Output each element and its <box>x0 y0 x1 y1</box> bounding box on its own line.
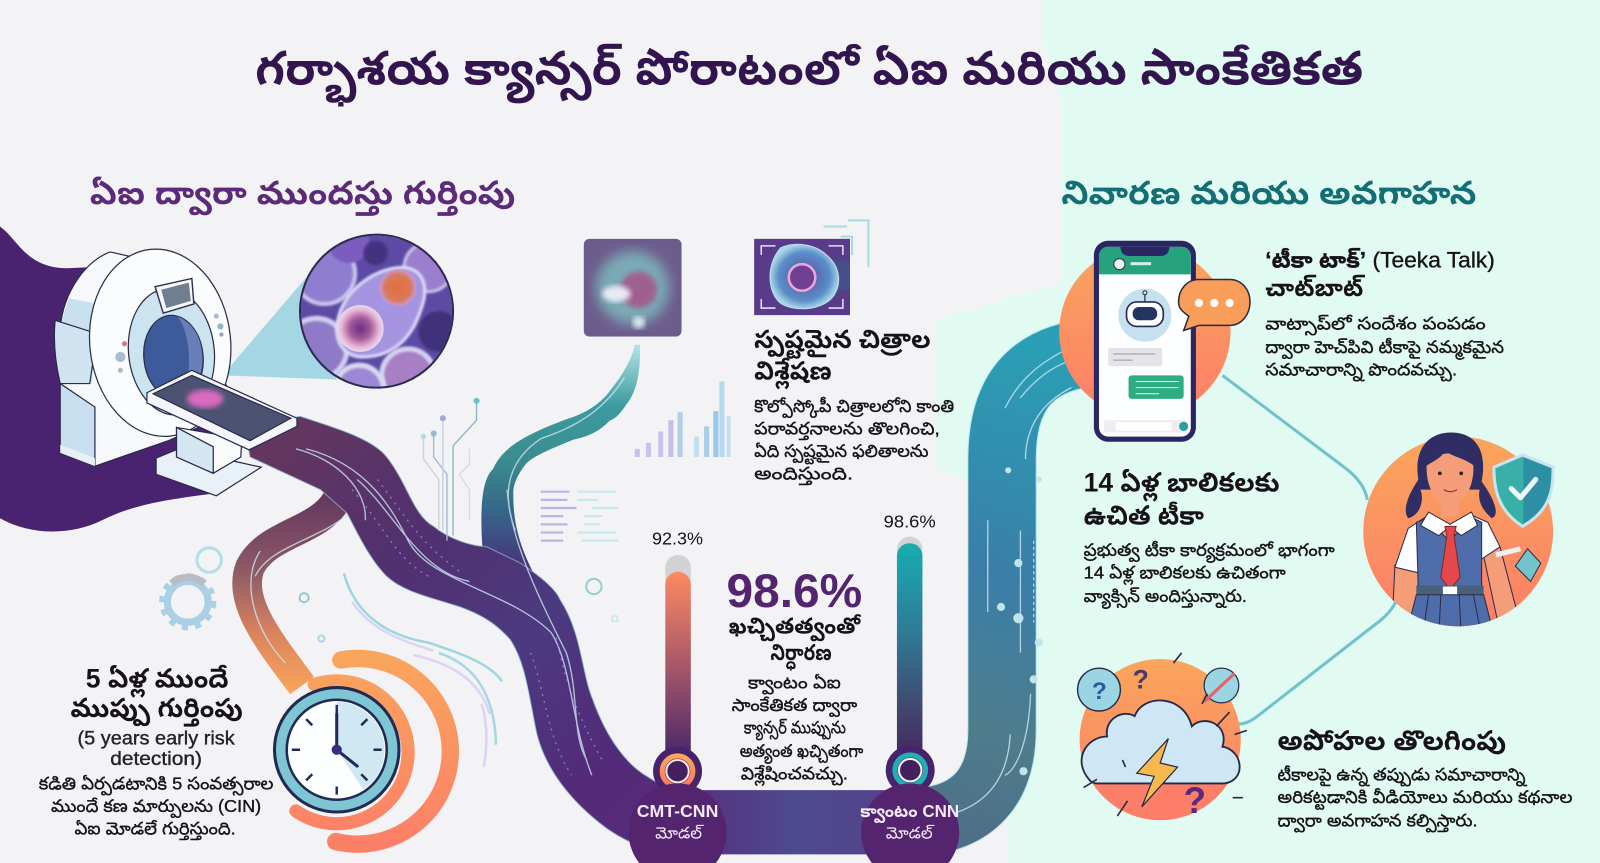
gloved hand with syringe <box>1515 549 1541 581</box>
lower coral half <box>1092 784 1228 820</box>
crack strokes <box>1084 653 1247 816</box>
icon: myth-busting storm cloud <box>1078 653 1247 824</box>
clock hands <box>337 714 357 766</box>
icon: myth-busting storm cloud: ? <box>1092 678 1107 705</box>
text block: Teeka Talk chatbot: చాట్‌బాట్ <box>1265 274 1366 302</box>
text block: clear image analysis: పరావర్తనాలను తొలగించి, <box>754 419 940 441</box>
track <box>665 555 691 596</box>
scanner pedestal foot <box>60 445 95 466</box>
skirt <box>1411 594 1491 626</box>
panel: chatbot phone <box>1059 241 1250 442</box>
code lines decoration <box>541 492 618 541</box>
cell view background <box>301 236 452 386</box>
gauge: Quantum CNN 98.6%: మోడల్ <box>886 825 935 843</box>
center stat: 98.6% accuracy <box>727 565 863 786</box>
scanner bore highlight <box>178 316 202 400</box>
circuit lines <box>421 398 480 541</box>
clock rim <box>274 688 399 812</box>
bar chart: light decorative bars <box>635 382 731 457</box>
table side <box>177 427 213 473</box>
clock shaded sector <box>337 702 384 790</box>
neck and face <box>1427 453 1473 516</box>
scanner shell shading <box>59 298 116 384</box>
cell view frame <box>300 235 453 388</box>
heading: early detection with AI: ఏఐ ద్వారా ముందస్తు గుర్తింపు <box>90 174 515 216</box>
wavy data lines <box>344 573 502 767</box>
ribbon sparkle dashes <box>352 479 602 775</box>
purple blob behind scanner <box>0 226 245 531</box>
text block: Teeka Talk chatbot: సమాచారాన్ని పొందవచ్చు. <box>1265 359 1457 381</box>
scanner table screen <box>153 375 291 441</box>
gauge: CMT-CNN 92.3%: CMT-CNN <box>637 801 718 821</box>
phone notch <box>1120 247 1169 256</box>
scanner bore <box>140 312 207 402</box>
microscope cell view <box>301 236 452 387</box>
ribbon: right teal fill <box>908 352 1097 822</box>
text block: free vaccine for 14-year-old girls: ప్రభుత్వ టీకా కార్యక్రమంలో భాగంగా <box>1083 540 1335 563</box>
lightning bolt <box>1137 739 1178 807</box>
collar <box>1420 512 1478 536</box>
icon: schoolgirl vaccination <box>1363 433 1553 643</box>
text block: 5 years early risk detection: కడితి ఏర్పడటానికి 5 సంవత్సరాల <box>39 774 273 796</box>
phone body <box>1094 241 1196 442</box>
text block: free vaccine for 14-year-old girls <box>1083 468 1335 609</box>
orange inner arc <box>296 681 408 824</box>
icon: gear <box>162 576 213 627</box>
belt <box>1416 586 1484 595</box>
top question mark: ? <box>1133 665 1149 695</box>
text block: free vaccine for 14-year-old girls: ఉచిత టీకా <box>1084 500 1204 530</box>
bulb outer <box>886 746 935 795</box>
large central cell <box>337 267 425 357</box>
text block: myth removal <box>1278 725 1572 832</box>
scanner buttons <box>115 314 223 373</box>
text block: Teeka Talk chatbot: వాట్సాప్‌లో సందేశం పంపడం <box>1265 313 1486 335</box>
clock ticks <box>292 705 382 795</box>
text block: 5 years early risk detection: detection) <box>110 748 202 770</box>
input bar <box>1104 420 1186 433</box>
ribbon node dots <box>997 467 1043 775</box>
chat header <box>1099 247 1191 274</box>
icon: blurred colposcopy image <box>584 239 682 337</box>
center stat: 98.6% accuracy: సాంకేతికత ద్వారా <box>732 695 857 717</box>
left question bubble <box>1078 668 1120 711</box>
clock face <box>287 700 387 800</box>
green chat message <box>1129 375 1184 399</box>
heading: స్పష్టమైన చిత్రాల <box>754 326 931 360</box>
bulb ring <box>662 756 693 786</box>
scanner machine <box>54 242 297 496</box>
text block: 5 years early risk detection <box>39 664 273 840</box>
shield <box>1494 455 1553 526</box>
data ribbon flowing across the page <box>245 345 1097 855</box>
connector lines between circles <box>1222 375 1396 724</box>
gauge: CMT-CNN 92.3%: మోడల్ <box>655 825 705 843</box>
text block: myth removal: టీకాలపై ఉన్న తప్పుడు సమాచారాన్ని <box>1278 764 1528 786</box>
model badge <box>629 783 727 863</box>
clear image background <box>754 239 850 315</box>
orange circle <box>1363 437 1553 626</box>
text block: 5 years early risk detection: (5 years early risk <box>78 728 235 750</box>
ribbon branch: orange to clock <box>247 500 337 686</box>
icon: clear cell image <box>754 239 850 315</box>
cone of light from scanner to microscope view <box>222 277 337 379</box>
gauge: Quantum CNN 98.6% <box>860 511 959 863</box>
hair fringe <box>1426 453 1474 466</box>
icon: small gear ring <box>197 548 221 572</box>
fill <box>897 543 922 765</box>
crossed question bubble <box>1204 668 1239 703</box>
text block: myth removal: అరికట్టడానికి వీడియోలు మరియు కథనాల <box>1278 787 1572 810</box>
heading: prevention and awareness: నివారణ మరియు అవగాహన <box>1061 174 1477 211</box>
center stat: 98.6% accuracy: క్యాన్సర్ ముప్పును <box>744 717 846 740</box>
bulb outer <box>653 747 702 796</box>
blurred image background <box>584 239 682 337</box>
text block: 5 years early risk detection: ముందే కణ మార్పులను (CIN) <box>51 796 261 818</box>
text block: myth removal: ద్వారా అవగాహన కల్పిస్తారు. <box>1278 810 1478 832</box>
cell glow on table <box>187 390 223 408</box>
ribbon: right turn up to phone <box>908 352 1097 822</box>
orange circle <box>1080 659 1241 820</box>
hair <box>1406 433 1496 518</box>
track <box>897 537 922 577</box>
ribbon: bottom flat band <box>684 791 918 854</box>
center stat: 98.6% accuracy: ఖచ్చితత్వంతో <box>729 613 861 641</box>
text block: clear image analysis <box>754 326 954 485</box>
bulb ring <box>895 755 926 785</box>
background: right mint panel <box>935 0 1600 863</box>
center stat: 98.6% accuracy: నిర్ధారణ <box>770 640 832 671</box>
text block: clear image analysis: విశ్లేషణ <box>754 357 832 389</box>
scanner rear shell <box>60 252 230 466</box>
sleeves <box>1395 515 1500 573</box>
orange outer arc <box>336 658 450 844</box>
orange circle <box>1059 246 1231 417</box>
text block: 5 years early risk detection: ముప్పు గుర్తింపు <box>70 693 243 727</box>
center stat: 98.6% accuracy: క్వాంటం ఏఐ <box>748 673 841 695</box>
cloud <box>1082 700 1240 783</box>
big number: 98.6% <box>727 565 862 617</box>
scanner table top <box>147 370 297 450</box>
tie <box>1441 526 1460 590</box>
center stat: 98.6% accuracy: అత్యంత ఖచ్చితంగా <box>740 741 863 764</box>
scanner pedestal <box>60 384 95 466</box>
bottom question mark: ? <box>1184 780 1206 821</box>
text block: Teeka Talk chatbot: ద్వారా హెచ్‌పివి టీకాపై నమ్మకమైన <box>1265 337 1504 360</box>
scanner inner ring <box>122 285 221 419</box>
scanner monitor <box>155 278 194 313</box>
arms <box>1392 546 1516 618</box>
vest <box>1416 518 1482 592</box>
scanner monitor screen <box>161 283 191 308</box>
ribbon: main purple fill <box>245 416 694 855</box>
text block: Teeka Talk chatbot <box>1265 247 1504 381</box>
gauge: Quantum CNN 98.6%: క్వాంటం CNN <box>860 801 959 823</box>
scan corner lines <box>823 220 868 267</box>
heading: ‘టీకా టాక్’ (Teeka Talk) <box>1265 247 1495 272</box>
center stat: 98.6% accuracy: విశ్లేషించవచ్చు. <box>741 763 848 786</box>
decorative bubbles <box>299 579 617 642</box>
value label: 98.6% <box>884 511 936 531</box>
scanner left side panel <box>54 320 97 384</box>
phone screen <box>1099 247 1191 437</box>
gauge: CMT-CNN 92.3% <box>629 529 727 863</box>
text block: clear image analysis: కొల్పోస్కోపీ చిత్రాలలోని కాంతి <box>754 396 954 418</box>
table support <box>177 427 242 473</box>
table base <box>156 449 261 496</box>
scanner front ring <box>80 242 240 443</box>
model badge <box>861 783 959 863</box>
speech bubble <box>1179 280 1250 331</box>
value label: 92.3% <box>652 529 703 549</box>
title: గర్భాశయ క్యాన్సర్ పోరాటంలో ఏఐ మరియు సాంకేతికత <box>255 43 1363 107</box>
icon: clock with arcs <box>274 658 450 844</box>
grey chat message <box>1108 348 1162 366</box>
text block: 5 years early risk detection: ఏఐ మోడలే గుర్తిస్తుంది. <box>74 818 236 840</box>
heading: 14 ఏళ్ల బాలికలకు <box>1084 468 1280 503</box>
text block: clear image analysis: అందిస్తుంది. <box>754 463 853 485</box>
ribbon branch: teal from blurred image <box>481 345 640 576</box>
fill <box>665 572 691 765</box>
text block: clear image analysis: ఏది స్పష్టమైన ఫలితాలను <box>754 441 929 465</box>
text block: free vaccine for 14-year-old girls: వ్యాక్సిన్ అందిస్తున్నారు. <box>1084 586 1247 609</box>
icon: robot <box>1118 289 1171 342</box>
ribbon light data lines <box>251 347 1082 816</box>
heading: అపోహల తొలగింపు <box>1278 725 1506 756</box>
heading: 5 ఏళ్ల ముందే <box>86 664 229 699</box>
text block: free vaccine for 14-year-old girls: 14 ఏళ్ల బాలికలకు ఉచితంగా <box>1084 562 1286 585</box>
